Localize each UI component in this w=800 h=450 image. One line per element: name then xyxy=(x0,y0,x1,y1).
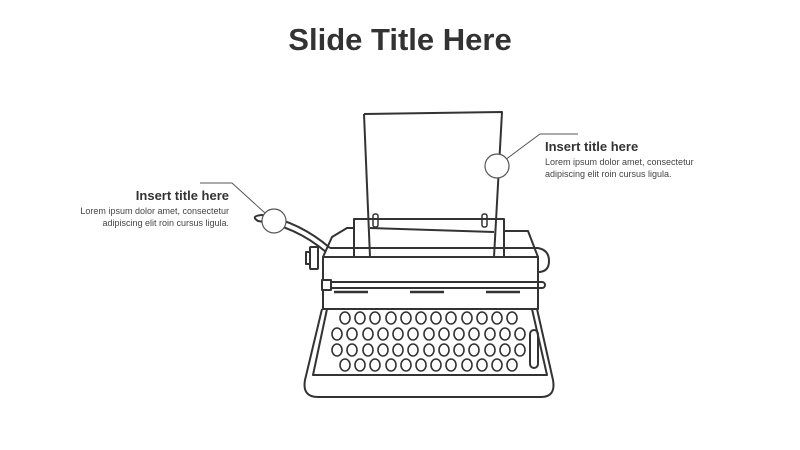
title: Slide Title Here xyxy=(288,22,512,57)
callout: right: adipiscing elit roin cursus ligula. xyxy=(545,169,672,179)
platen rod xyxy=(322,280,545,292)
lever arm xyxy=(255,215,330,252)
callout: right xyxy=(545,139,694,179)
paper holder xyxy=(354,214,504,257)
marker: right circle xyxy=(485,154,509,178)
keyboard base xyxy=(305,309,554,397)
callout: left: adipiscing elit roin cursus ligula. xyxy=(102,218,229,228)
body top xyxy=(306,228,549,309)
connector: right xyxy=(505,134,578,160)
callout: left: Lorem ipsum dolor amet, consectetur xyxy=(80,206,229,216)
connector: left xyxy=(200,183,265,213)
marker: left circle xyxy=(262,209,286,233)
callout: right: Insert title here xyxy=(545,139,638,154)
callout: left xyxy=(80,188,229,228)
callout: left: Insert title here xyxy=(136,188,229,203)
callout: right: Lorem ipsum dolor amet, consectetur xyxy=(545,157,694,167)
paper xyxy=(364,112,502,257)
